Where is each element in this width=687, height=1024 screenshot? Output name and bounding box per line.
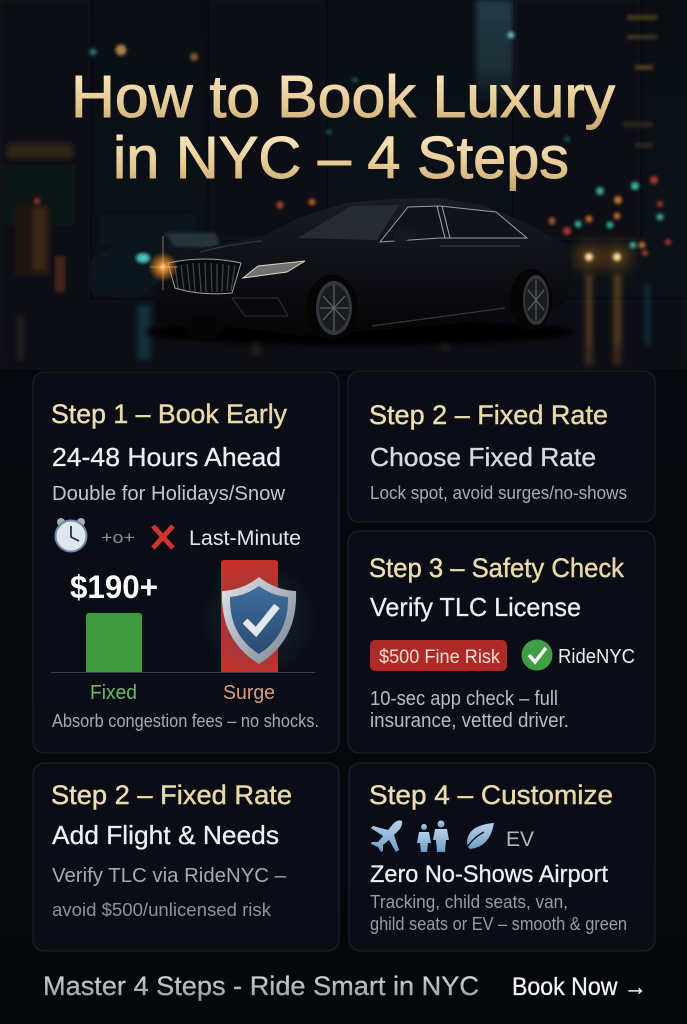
text: Double for Holidays/Snow <box>52 483 286 505</box>
wet road reflections <box>18 275 650 365</box>
badge: fine risk <box>370 640 507 671</box>
car body <box>155 198 574 336</box>
title: in NYC – 4 Steps <box>113 125 569 191</box>
grille <box>168 259 241 294</box>
body text <box>370 688 569 732</box>
body text: avoid $500/unlicensed risk <box>52 900 272 920</box>
body text: insurance, vetted driver. <box>370 710 569 732</box>
front light flare <box>148 236 178 290</box>
label: surge: Surge <box>223 682 275 704</box>
panel: step 3 safety check <box>348 531 655 753</box>
subheading: Verify TLC License <box>370 592 581 622</box>
footer tagline: Master 4 Steps - Ride Smart in NYC <box>43 971 479 1001</box>
icon: leaf <box>464 823 494 852</box>
body text <box>370 892 627 934</box>
window pillar <box>437 206 450 238</box>
body highlights <box>200 241 520 326</box>
caption: Absorb congestion fees – no shocks. <box>52 711 319 731</box>
icon label: plus o plus: +o+ <box>101 528 135 547</box>
bar: surge <box>221 560 278 672</box>
oncoming headlights <box>575 243 631 271</box>
street lights and bokeh <box>34 15 671 256</box>
title <box>71 64 616 191</box>
far front wheel <box>184 315 224 341</box>
side windows <box>380 206 527 242</box>
panel: step 4 customize <box>349 763 655 951</box>
heading: Step 2 – Fixed Rate <box>369 400 608 430</box>
background car <box>55 232 222 298</box>
rear wheel <box>510 269 552 331</box>
icon: shield with check <box>199 560 319 680</box>
icon: alarm clock <box>56 518 86 552</box>
heading: Step 2 – Fixed Rate <box>51 780 292 810</box>
icon: green check <box>522 640 552 670</box>
heading: Step 1 – Book Early <box>51 399 287 429</box>
brand: RideNYC: RideNYC <box>558 646 635 668</box>
call to action: Book Now → <box>512 973 647 1001</box>
subheading: 24-48 Hours Ahead <box>52 442 281 472</box>
body text: Verify TLC via RideNYC – <box>52 865 287 887</box>
bumper intake <box>232 298 288 316</box>
icon: adult and child <box>417 820 449 852</box>
bar: fixed <box>86 613 142 672</box>
body text: Tracking, child seats, van, <box>370 892 568 912</box>
value label: $190+ <box>70 569 158 605</box>
badge: fine risk: $500 Fine Risk <box>379 647 500 668</box>
text: EV: EV <box>506 828 534 851</box>
heading: Step 3 – Safety Check <box>369 553 624 583</box>
wing mirror <box>392 227 418 243</box>
subheading: Add Flight & Needs <box>52 820 279 850</box>
body text: 10-sec app check – full <box>370 688 558 710</box>
hero car: black luxury sedan <box>145 198 575 345</box>
front wheel <box>306 275 358 341</box>
heading: Step 4 – Customize <box>369 780 613 810</box>
body text <box>52 865 287 920</box>
label: fixed: Fixed <box>90 682 137 704</box>
subheading: Zero No-Shows Airport <box>370 861 608 888</box>
subheading: Choose Fixed Rate <box>370 442 596 472</box>
panel: step 1 book early <box>33 372 339 753</box>
icon: airplane <box>371 820 402 852</box>
panel: step 2 fixed rate <box>348 371 655 522</box>
icon: red cross <box>153 526 173 548</box>
bar chart: fixed vs surge <box>51 560 315 704</box>
panel: step 2 add flight <box>33 763 339 951</box>
title: How to Book Luxury <box>71 64 616 130</box>
text: last-minute: Last-Minute <box>189 527 301 550</box>
windshield <box>298 205 399 240</box>
text: Lock spot, avoid surges/no-shows <box>370 483 627 503</box>
body text: ghild seats or EV – smooth & green <box>370 914 627 934</box>
headlight <box>243 261 305 278</box>
